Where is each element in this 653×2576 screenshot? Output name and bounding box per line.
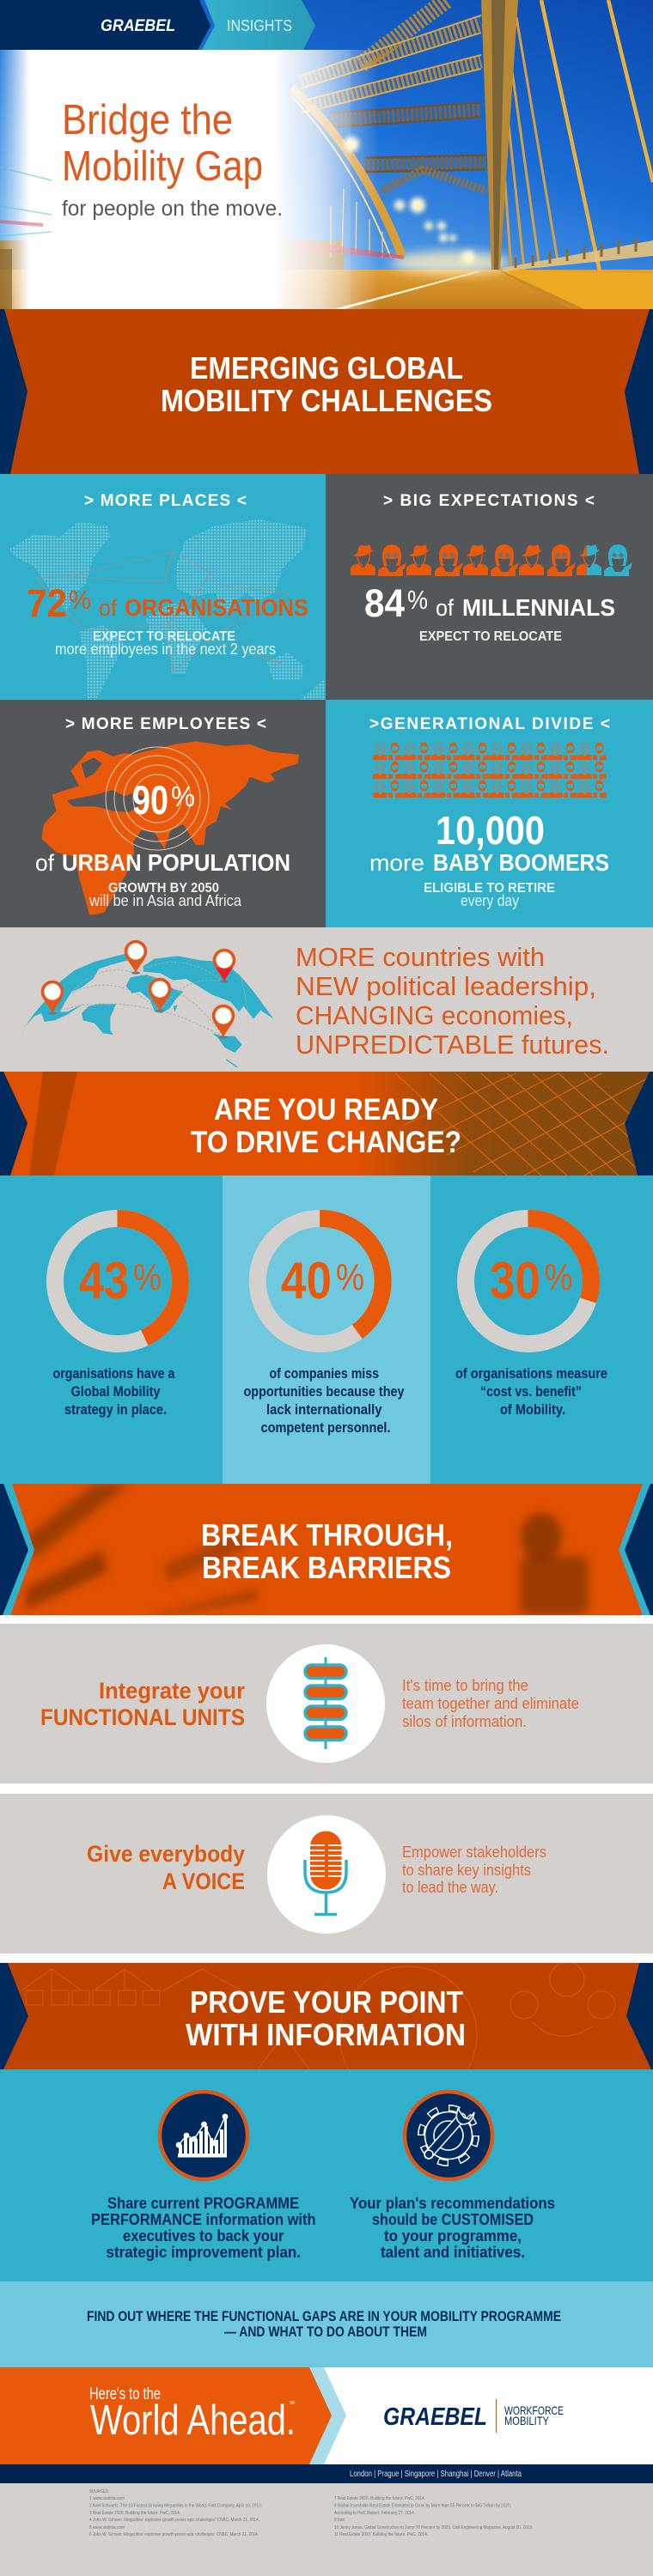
statement text (296, 942, 609, 1060)
heading (87, 1841, 245, 1894)
sources: 11 Real Estate 2020: Building the future. PwC, 2014. (334, 2532, 428, 2537)
stat description (55, 629, 276, 658)
logo: Graebel Workforce Mobility (383, 2399, 564, 2433)
header: Insights tab (202, 0, 315, 50)
sources: 8 Global Investable Real Estate Estimated to Grow by More than 55 Percent to $45 Trillion by 2020, (334, 2504, 511, 2509)
stat: 84% of millennials (364, 581, 615, 625)
panel: give everybody a voice (0, 1794, 653, 1953)
donut: 43%: % (133, 1256, 162, 1298)
panel: generational divide (326, 700, 653, 927)
donut: 30% (466, 1218, 591, 1344)
stat: 72% of organisations (27, 581, 308, 625)
tagline (89, 2385, 296, 2444)
text: customised plan: should be CUSTOMISED (372, 2210, 534, 2228)
caption: 43% (53, 1366, 175, 1418)
banner heading (186, 1984, 466, 2052)
panel: call to action: FIND OUT WHERE THE FUNCTIONAL GAPS ARE IN YOUR MOBILITY PROGRAMME (87, 2308, 561, 2324)
stat: 72% of organisations: of (99, 595, 117, 621)
stat: 84% of millennials: % (407, 585, 428, 615)
text: share performance: strategic improvement plan. (107, 2243, 301, 2261)
office locations bar: London | Prague | Singapore | Shanghai | Denver | Atlanta (350, 2470, 522, 2479)
office locations bar (0, 2464, 653, 2483)
pictogram: ten millennials (351, 544, 632, 576)
body text: to share key insights (402, 1862, 531, 1879)
banner heading: MOBILITY CHALLENGES (161, 383, 492, 418)
footer brand band (0, 2367, 653, 2464)
panel: call to action: — AND WHAT TO DO ABOUT THEM (224, 2324, 427, 2340)
concentric rings (106, 747, 209, 850)
stat label: every day (461, 892, 519, 909)
sources (0, 2483, 653, 2576)
tagline: SN (290, 2401, 295, 2406)
donut: 43% (55, 1218, 180, 1344)
heading (40, 1678, 245, 1730)
dotted world map (9, 519, 325, 700)
sources: 1 www.statista.com (89, 2496, 125, 2501)
stat description: EXPECT TO RELOCATE (419, 629, 562, 644)
logo: Graebel Workforce Mobility: MOBILITY (504, 2414, 550, 2427)
sources: According to PwC Report. February 27, 2014. (334, 2511, 415, 2516)
sources: 7 Real Estate 2020: Building the future. PwC, 2014. (334, 2496, 425, 2501)
map: Eurasia and Africa (41, 741, 299, 915)
statement text: UNPREDICTABLE futures. (296, 1030, 609, 1060)
stat: 72% of organisations: % (69, 585, 91, 615)
banner heading: BREAK BARRIERS (202, 1550, 451, 1585)
tagline: World Ahead. (90, 2397, 296, 2444)
icon: microphone (267, 1815, 386, 1934)
text: share performance (91, 2194, 316, 2261)
panel: information actions (0, 2069, 653, 2281)
statement text: NEW political leadership, (296, 971, 596, 1001)
heading: Give everybody (87, 1841, 245, 1867)
caption: 40%: of companies miss (270, 1366, 379, 1382)
caption: 43%: organisations have a (53, 1366, 175, 1382)
icon: linked units (266, 1644, 385, 1763)
text: customised plan: to your programme, (384, 2227, 522, 2245)
donut: 40%: 40 (281, 1252, 332, 1309)
banner heading: BREAK THROUGH, (201, 1517, 453, 1552)
hero photo: bridge (0, 0, 653, 309)
panel: more places (0, 474, 326, 700)
stat: 84% of millennials: MILLENNIALS (462, 594, 615, 621)
banner heading (191, 1093, 461, 1159)
sources: 3 Real Estate 2020: Building the future. PwC, 2014. (89, 2511, 180, 2516)
body text: to lead the way. (402, 1879, 498, 1896)
banner heading: EMERGING GLOBAL (190, 350, 463, 386)
heading: FUNCTIONAL UNITS (40, 1704, 245, 1730)
sources: 2 Ariel Schwartz. The 10 Fastest Growing Megacities in the World. Fast Company, April 16, 2013. (89, 2504, 262, 2509)
banner: break through (0, 1484, 653, 1618)
stat label (35, 849, 290, 909)
banner: prove your point (0, 1963, 653, 2069)
logo: Graebel Workforce Mobility: GRAEBEL (383, 2403, 487, 2431)
stat label: will be in Asia and Africa (88, 892, 242, 909)
sources: 4 John W. Schoen. Megacities' explosive growth poses epic challenges" CNBC, March 21, 2014. (89, 2518, 259, 2523)
header: Graebel logo tab (0, 0, 211, 50)
caption: 40%: opportunities because they (244, 1384, 405, 1400)
caption: 30%: of organisations measure (455, 1366, 607, 1382)
sources: 9 Ibid. (334, 2518, 345, 2523)
body text (402, 1677, 579, 1730)
donut: 43%: 43 (79, 1252, 129, 1309)
caption: 43%: strategy in place. (64, 1402, 167, 1418)
stat description: more employees in the next 2 years (55, 641, 276, 658)
caption: 43%: Global Mobility (70, 1384, 161, 1400)
donut: 30%: % (545, 1256, 572, 1298)
stat label: of (35, 850, 54, 876)
text: share performance: PERFORMANCE information with (91, 2210, 316, 2228)
panel: call to action (0, 2281, 653, 2367)
caption: 30%: of Mobility. (500, 1402, 565, 1418)
statement text: CHANGING economies, (296, 1000, 573, 1030)
banner: are you ready (0, 1072, 653, 1176)
stat description: EXPECT TO RELOCATE (93, 629, 235, 644)
header: Graebel logo tab: GRAEBEL (101, 17, 175, 35)
globe with pins (21, 940, 273, 1067)
banner heading: PROVE YOUR POINT (190, 1984, 463, 2020)
text: share performance: executives to back your (123, 2227, 284, 2245)
stat: 10,000: 10,000 (436, 808, 545, 853)
icon: gear and wrench (405, 2092, 492, 2179)
header: Insights tab: INSIGHTS (227, 17, 292, 34)
caption: 40%: competent personnel. (261, 1420, 390, 1436)
donut: 40% (258, 1218, 383, 1344)
caption: 30%: “cost vs. benefit” (480, 1384, 582, 1400)
stat label: GROWTH BY 2050 (108, 881, 219, 896)
donut: 40%: % (336, 1256, 364, 1298)
stat label: ELIGIBLE TO RETIRE (424, 881, 555, 896)
tagline: Here's to the (89, 2385, 161, 2403)
stat label (369, 849, 609, 909)
title: Bridge the (62, 97, 233, 143)
stat: 72% of organisations: 72 (27, 581, 67, 625)
body text (402, 1844, 546, 1896)
panel: big expectations (326, 474, 653, 700)
stat: 84% of millennials: 84 (364, 581, 405, 625)
panel heading: > MORE PLACES < (84, 492, 247, 510)
stat: 84% of millennials: of (436, 595, 454, 621)
banner heading (201, 1517, 453, 1585)
banner heading: TO DRIVE CHANGE? (191, 1126, 461, 1159)
pictogram: baby boomers (373, 743, 607, 798)
sources: SOURCES: (89, 2489, 109, 2494)
stat label: BABY BOOMERS (433, 849, 609, 876)
body text: Empower stakeholders (402, 1844, 546, 1861)
heading: A VOICE (162, 1868, 245, 1894)
banner heading: WITH INFORMATION (186, 2017, 466, 2052)
sources: 10 Jenny Jones. Global Construction to Jump 70 Percent by 2025. Civil Engineering Magazine, August 20, 2013. (334, 2525, 533, 2530)
stat label: more (369, 850, 424, 876)
caption: 40% (244, 1366, 405, 1436)
stat: 90%: 90 (132, 777, 168, 823)
title (62, 97, 263, 190)
sources: 5 www.statista.com (89, 2525, 125, 2530)
caption: 40%: lack internationally (266, 1402, 382, 1418)
panel heading: > MORE EMPLOYEES < (65, 715, 266, 733)
stat: 72% of organisations: ORGANISATIONS (125, 594, 308, 621)
text: customised plan: Your plan's recommendations (350, 2194, 555, 2212)
panel: more employees (0, 700, 326, 927)
body text: silos of information. (402, 1713, 527, 1730)
body text: team together and eliminate (402, 1695, 579, 1712)
body text: It's time to bring the (402, 1677, 528, 1694)
text: customised plan (350, 2194, 555, 2261)
caption: 30% (455, 1366, 607, 1418)
stat label: URBAN POPULATION (62, 849, 290, 876)
donut: 30%: 30 (490, 1252, 540, 1309)
subtitle: for people on the move. (62, 197, 283, 221)
logo: Graebel Workforce Mobility: WORKFORCE (504, 2403, 564, 2417)
banner: emerging global mobility challenges (0, 309, 653, 474)
icon: performance chart (160, 2092, 247, 2179)
text: customised plan: talent and initiatives. (381, 2243, 525, 2261)
statement text: MORE countries with (296, 942, 545, 972)
panel: political change (0, 927, 653, 1072)
banner heading: ARE YOU READY (214, 1093, 438, 1127)
text: share performance: Share current PROGRAMME (107, 2194, 299, 2212)
title: Mobility Gap (62, 143, 263, 190)
panel: integrate functional units (0, 1624, 653, 1783)
panel: readiness statistics (0, 1176, 653, 1484)
banner heading (161, 350, 492, 418)
network lines (35, 551, 290, 671)
sources: 6 John W. Schoen. Megacities' explosive growth poses epic challenges. CNBC, March 21, 2014. (89, 2532, 259, 2537)
stat: 90%: % (171, 781, 195, 812)
panel heading: >GENERATIONAL DIVIDE < (369, 715, 610, 733)
panel heading: > BIG EXPECTATIONS < (383, 492, 595, 510)
heading: Integrate your (99, 1678, 245, 1704)
